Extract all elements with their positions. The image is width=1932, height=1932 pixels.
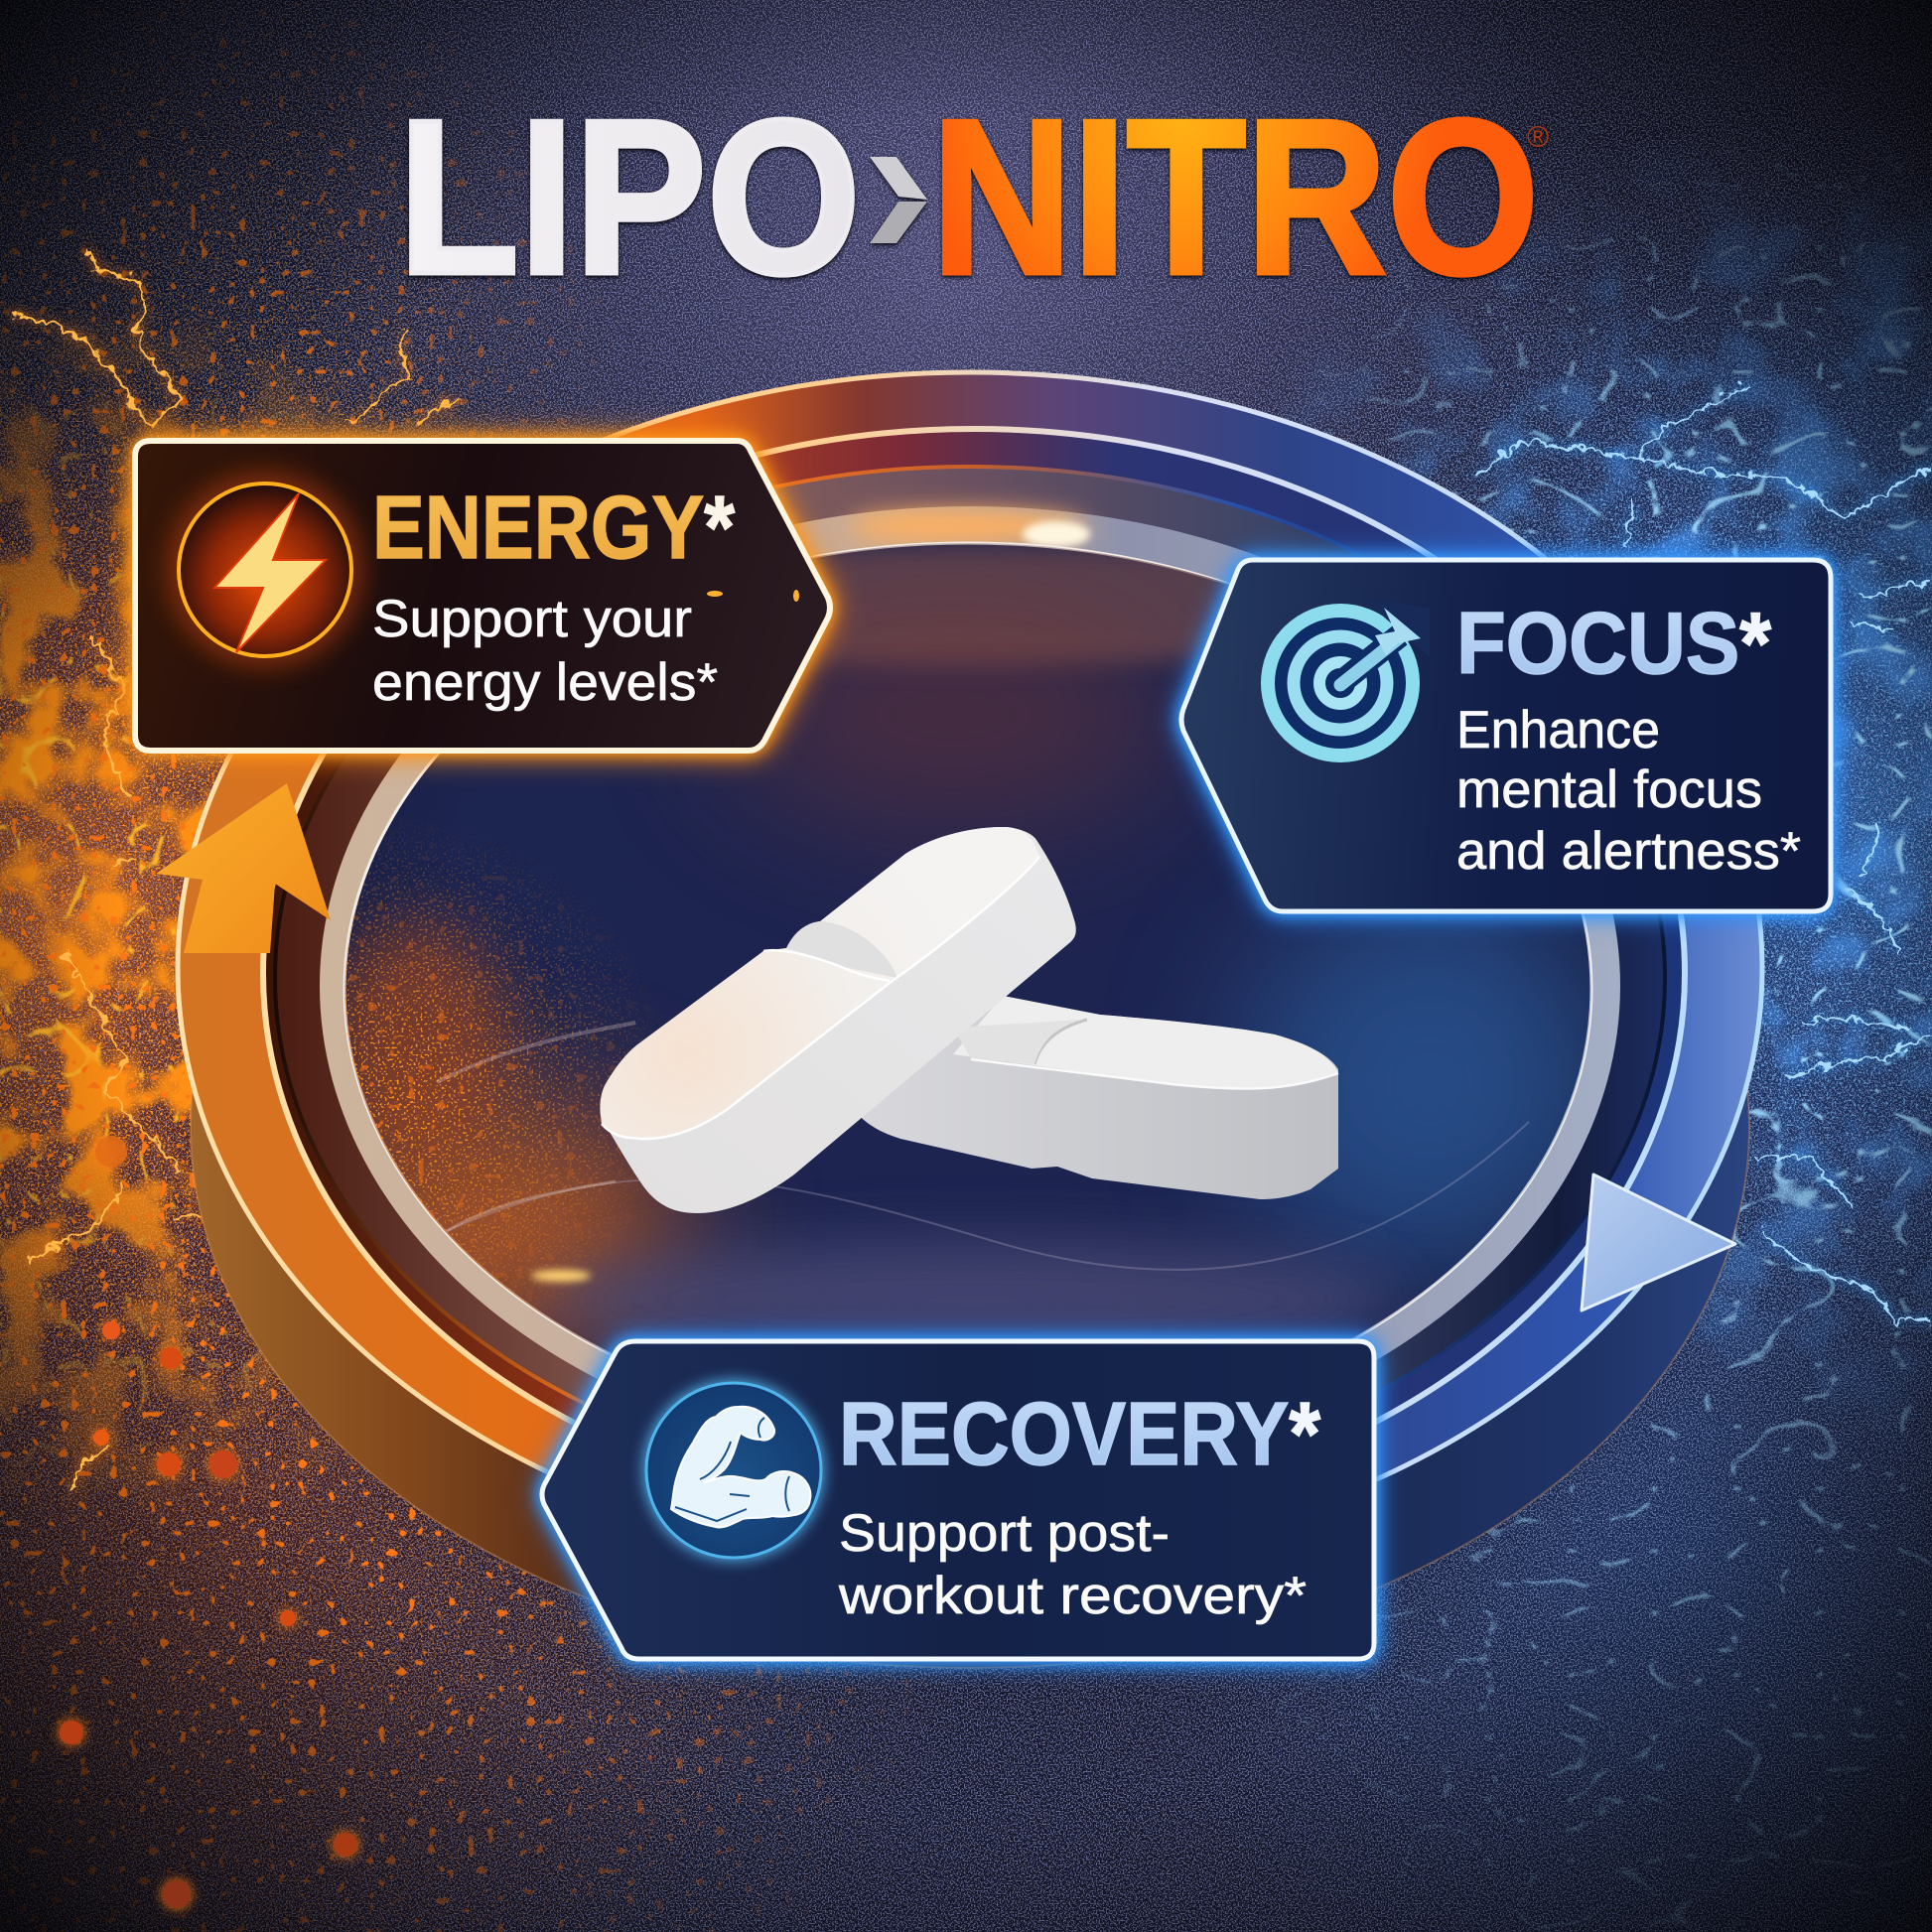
panel: focus [1181,560,1831,911]
text: focus description: mental focus [1456,760,1762,819]
dark inner ring band [275,467,1665,1489]
front pill [600,827,1076,1213]
text: focus description [1456,701,1801,881]
panel: recovery [542,1341,1374,1659]
icon: target [1261,598,1430,762]
title word: lipo: LIPO [398,74,861,321]
icon: flexed arm [646,1383,821,1558]
text: focus description: Enhance [1456,701,1660,759]
lightning: focus side [1473,380,1929,1318]
title [398,74,1549,321]
text: recovery description [838,1504,1307,1625]
title word: nitro: NITRO [931,74,1539,321]
centre basin [344,542,1592,1356]
ring base side wall [191,586,1749,1668]
pills [600,827,1338,1213]
coloured ring band [178,372,1762,1564]
glints on energy panel [707,590,799,602]
heading: focus: FOCUS* [1456,594,1772,692]
text: energy description: Support your [372,590,692,648]
back pill [854,996,1338,1199]
text: recovery description: workout recovery* [838,1567,1307,1625]
arrow: orange arrowhead [156,783,331,953]
icon: lightning bolt [166,471,364,669]
arrow: blue arrowhead [1582,1174,1735,1311]
heading: recovery: RECOVERY* [839,1385,1320,1484]
panel: energy [135,441,830,751]
text: energy description: energy levels* [372,653,718,712]
text: recovery description: Support post- [839,1504,1170,1563]
circular ring [175,369,1765,1669]
silver inner band [320,506,1620,1465]
text: energy description [372,590,718,712]
registered mark: ® [1527,121,1549,154]
heading: energy: ENERGY* [372,479,735,578]
lightning and sparks: energy side [13,245,457,1908]
icon: chevron [870,157,927,243]
text: focus description: and alertness* [1456,822,1801,881]
glow at ring top [849,509,1090,547]
second ring band [263,429,1685,1517]
